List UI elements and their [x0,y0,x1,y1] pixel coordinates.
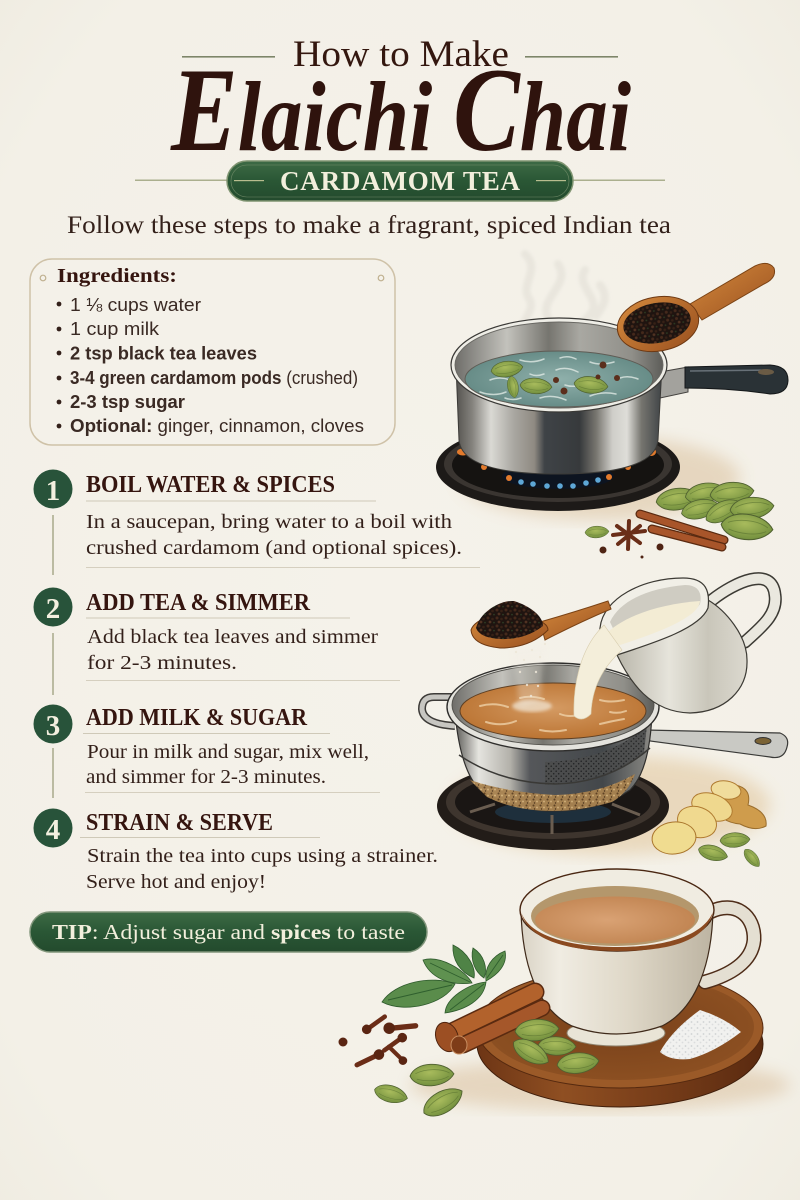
cloves [338,1014,416,1068]
step 3 number: 3 [46,710,60,742]
step 1 number [34,470,72,508]
step 4 text: Serve hot and enjoy! [86,871,266,893]
left loop handle [422,697,455,726]
step 4 [34,808,438,893]
wooden spoon with tea [613,263,775,358]
loose pods [372,1063,467,1122]
illustration: ginger and pods [650,779,766,870]
cardamom pods on saucer [509,1018,600,1075]
milk jug [600,578,747,713]
step 2 text: Add black tea leaves and simmer [87,626,378,648]
ingredients list: 2-3 tsp sugar [70,392,185,412]
cup body [521,910,713,1046]
step 3 text: Pour in milk and sugar, mix well, [87,741,369,763]
step 2 number [34,588,72,626]
step 1 [34,470,480,568]
ingredients list: 3-4 green cardamom pods (crushed) [70,368,358,388]
falling tea and sugar grains [512,643,546,708]
step 1 text [86,511,462,559]
cinnamon curled ends [432,1019,467,1055]
step 1 number: 1 [46,475,60,507]
star anise and cloves [613,521,645,549]
step 1 text: crushed cardamom (and optional spices). [86,537,462,559]
step 4 text: Strain the tea into cups using a strainer. [87,845,438,867]
step 3 text [86,741,369,788]
step 2 heading: ADD TEA & SIMMER [86,590,311,616]
step 1 text: In a saucepan, bring water to a boil with [86,511,452,533]
illustration: pan with milk pouring [422,578,788,855]
ingredients list: 1 cup milk [70,319,160,339]
step 3 text: and simmer for 2-3 minutes. [86,766,326,788]
ingredients list: 1 ⅛ cups water [70,295,201,315]
subtitle: Follow these steps to make a fragrant, spiced Indian tea [67,212,671,239]
title: Elaichi Chai: Elaichi Chai [170,43,631,176]
step 1 heading: BOIL WATER & SPICES [86,472,335,498]
step 2 [34,588,400,681]
step 2 number: 2 [46,593,60,625]
step 3 [34,704,380,793]
sugar pile [660,1010,741,1059]
ingredients list: Optional: ginger, cinnamon, cloves [70,416,364,436]
tip pill [30,912,427,952]
step 4 text [86,845,438,893]
pan handle [660,365,788,398]
illustration: cardamom pods and cinnamon [585,479,775,558]
cup rim and chai [520,869,714,951]
step 4 number [34,808,72,848]
step 2 text: for 2-3 minutes. [87,652,237,674]
pot body [456,365,662,474]
pan rim and chai [447,663,659,751]
banner: Cardamom Tea: CARDAMOM TEA [280,166,520,196]
milk stream [574,625,622,719]
wooden saucer [477,968,763,1107]
wooden spoon with tea leaves [471,601,611,648]
jug handle [712,579,775,642]
illustration: chai cup on wooden saucer [338,869,790,1122]
step 3 number [34,704,72,744]
cinnamon sticks [452,992,542,1045]
panel: ingredients [30,259,395,445]
step connectors [52,515,54,798]
steam [520,254,605,352]
step 4 heading: STRAIN & SERVE [86,810,273,836]
ingredients heading: Ingredients: [57,265,177,287]
step 2 text [87,626,378,674]
right handle [645,730,788,758]
pan body [455,712,652,811]
ingredients list [57,295,364,436]
cinnamon sticks [640,514,724,547]
tip pill: TIP: Adjust sugar and spices to taste [52,920,405,944]
banner: Cardamom Tea [135,161,665,201]
gas burner [437,762,669,850]
gas burner [436,423,680,511]
step 4 number: 4 [46,814,60,846]
mint leaves [382,945,506,1013]
ingredients list: 2 tsp black tea leaves [70,344,257,364]
title: How to Make: How to Make [293,34,509,75]
cup handle [705,908,754,982]
step 3 heading: ADD MILK & SUGAR [86,705,308,731]
illustration: boiling saucepan on burner [436,254,788,520]
pot rim and interior [451,318,667,412]
